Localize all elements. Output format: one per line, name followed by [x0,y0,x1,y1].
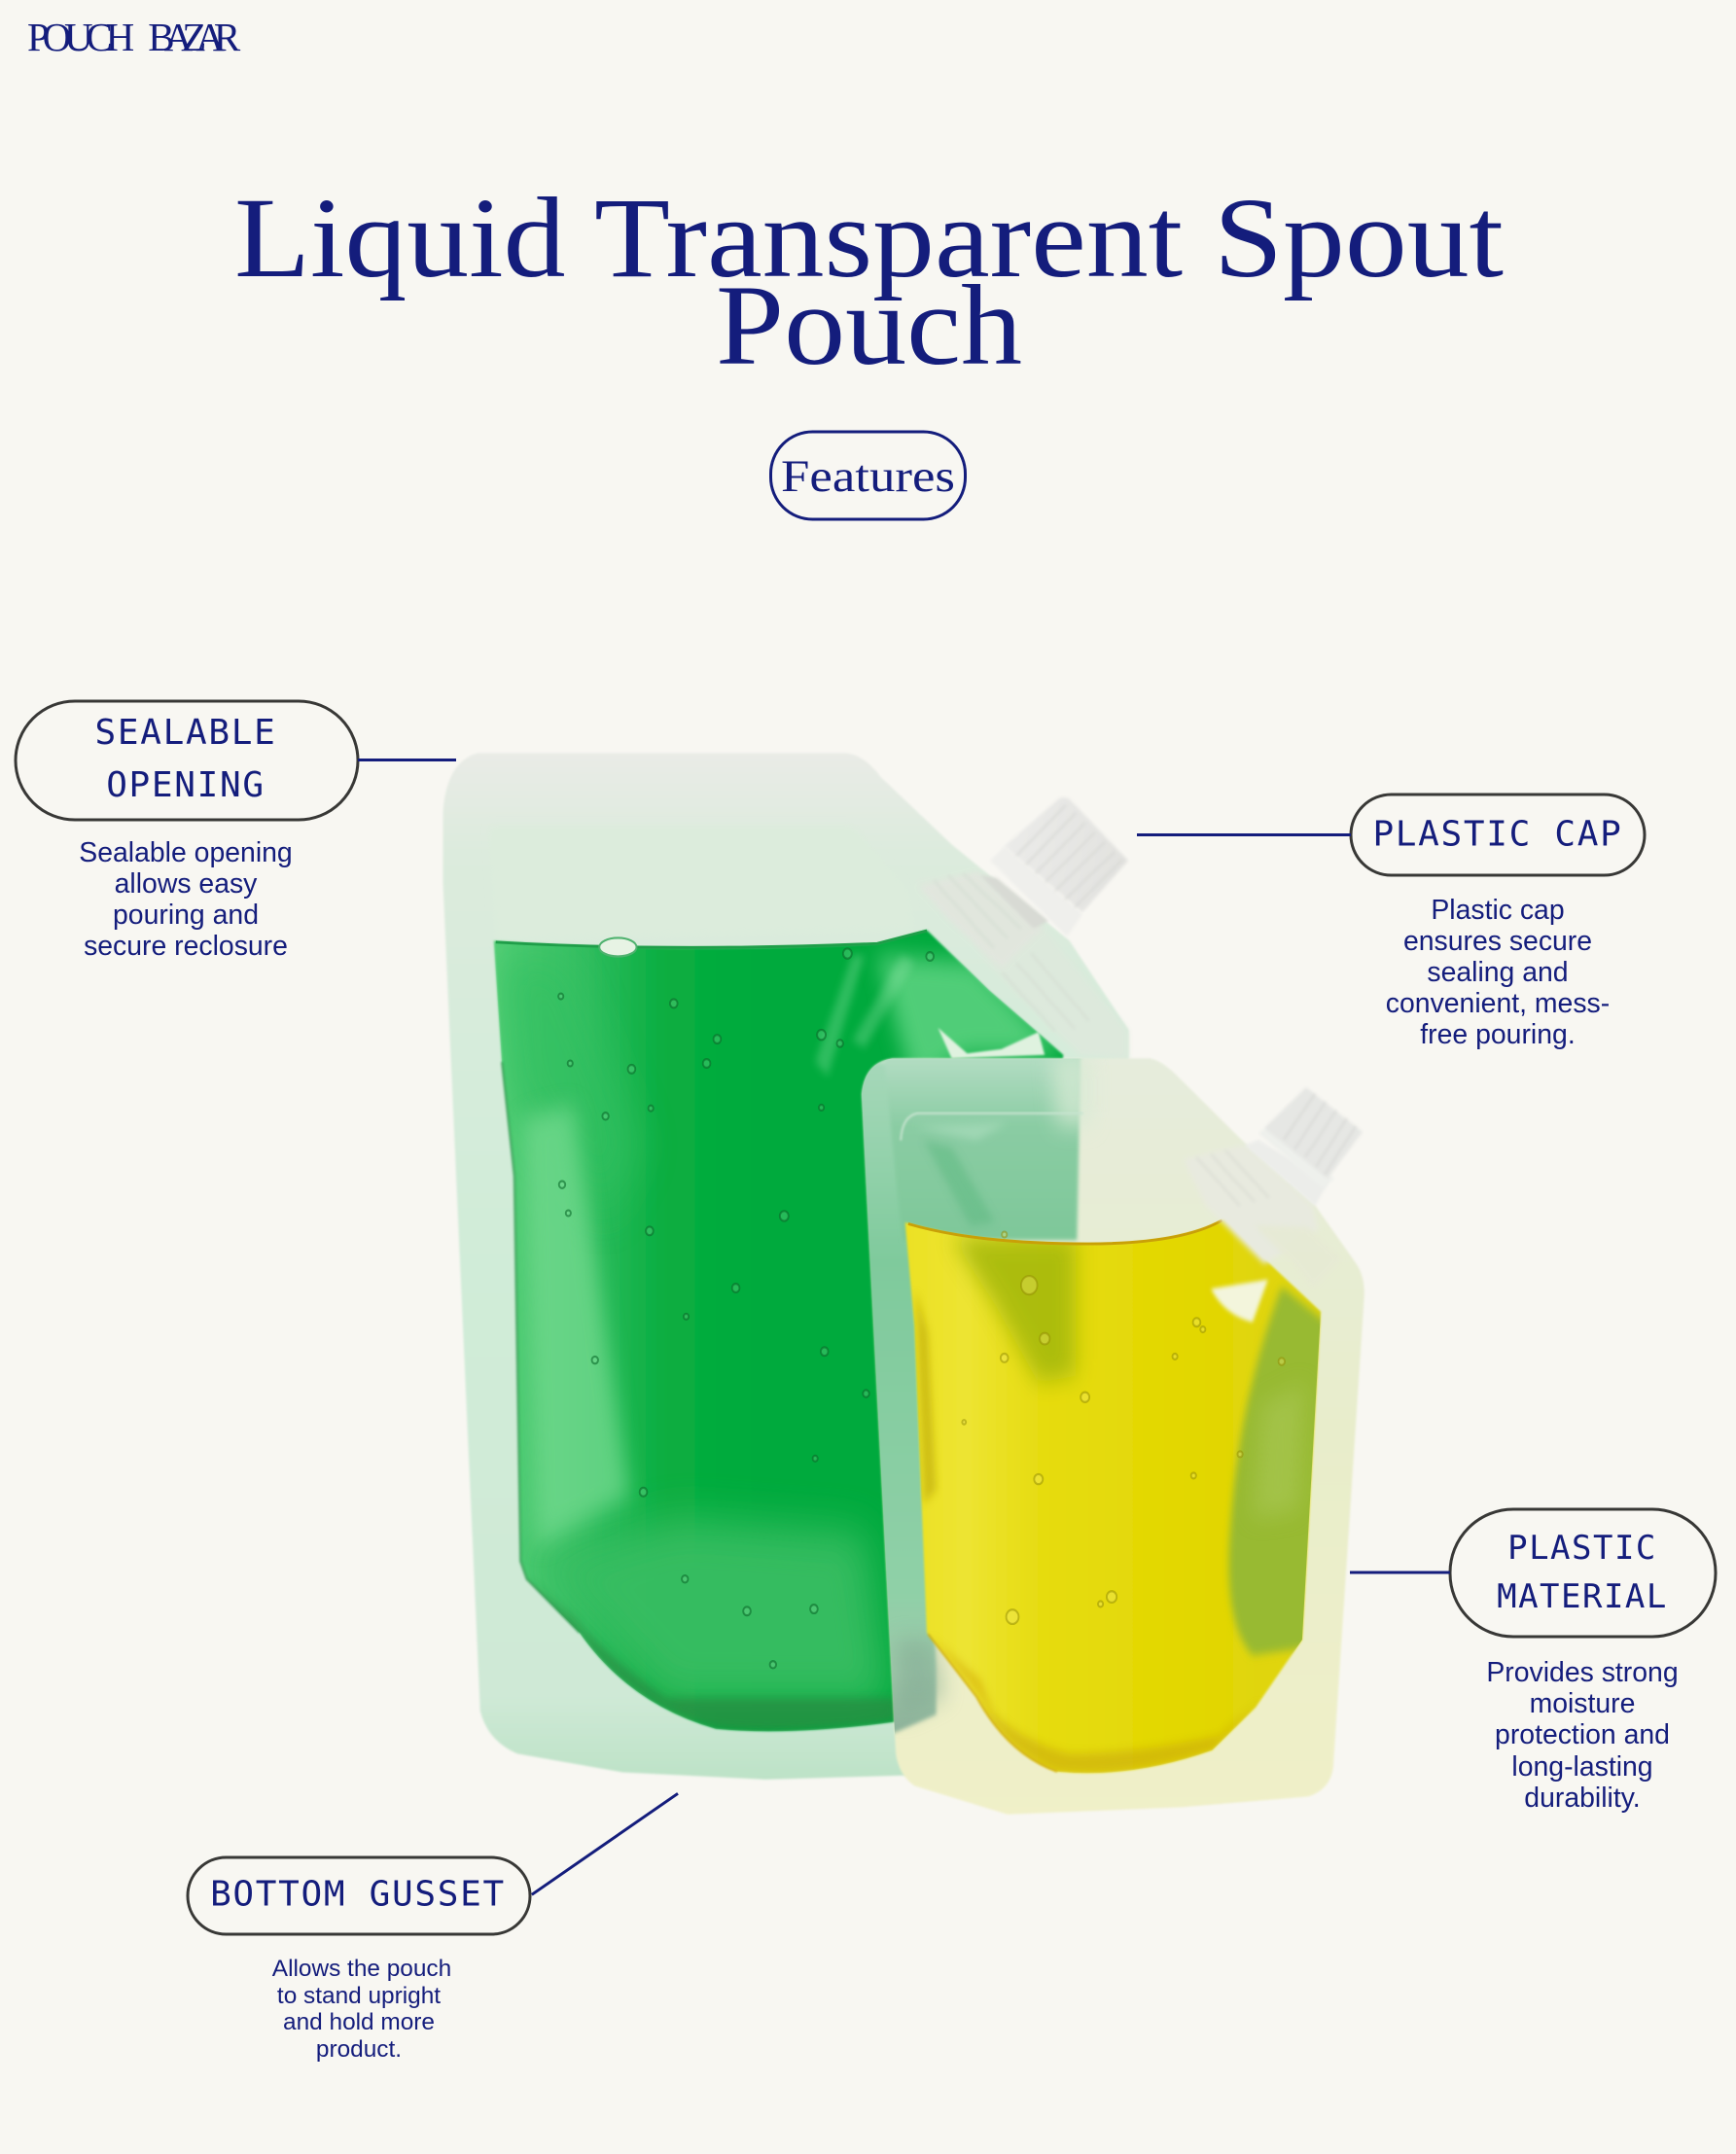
gold left and bottom shading [916,1290,937,1504]
brand logo: POUCH [27,15,134,59]
title [234,174,1504,389]
green liquid [494,930,1063,1731]
yellow liquid [905,1218,1321,1773]
green patch right [1228,1287,1330,1655]
green show-through [852,1051,1091,1732]
callout: plastic material: moisture [1530,1688,1635,1719]
product image: two spout pouches [443,753,1364,1815]
callout: plastic cap [1137,795,1645,1050]
callout: plastic material: PLASTIC [1507,1529,1657,1568]
cap body [1264,1087,1363,1179]
cap body [1005,797,1128,912]
cap ring [990,846,1082,936]
callout: plastic cap: Plastic cap [1431,895,1565,926]
callout: sealable opening: allows easy [115,868,258,900]
callout: sealable opening: Sealable opening [79,837,293,868]
small yellow pouch [852,1051,1364,1815]
callout: bottom gusset: to stand upright [277,1983,441,2009]
features badge [770,432,965,519]
features badge: Features [781,451,955,502]
spout ribs [1196,1150,1269,1206]
callout: bottom gusset: Allows the pouch [272,1956,451,1982]
brand logo: BAZAR [149,15,241,59]
callout: bottom gusset [188,1793,678,2063]
brand logo [27,15,241,59]
callout: bottom gusset: BOTTOM GUSSET [210,1875,506,1914]
inner seal shading [489,827,914,940]
small pouch spout and cap [1184,1087,1363,1289]
spout body [915,873,1128,1060]
highlight under spout [938,1028,1045,1058]
olive show-through [952,1237,1076,1383]
callout: plastic cap: sealing and [1427,957,1569,988]
callout: plastic material: durability. [1524,1783,1641,1814]
cap ribs [1016,805,1122,907]
liquid light and shaded areas [499,955,1063,1731]
neck [980,875,1048,929]
bubbles [558,948,934,1668]
dark base of liquid [545,1593,894,1731]
cap ring and collar [1245,1140,1329,1206]
liquid surface line [496,931,927,947]
spout body [1184,1145,1318,1264]
callout: plastic cap: PLASTIC CAP [1372,815,1623,854]
callout: sealable opening: pouring and [113,900,259,931]
callout: sealable opening: OPENING [106,765,266,805]
callout: plastic cap: ensures secure [1403,926,1592,957]
gold surface line [908,1220,1222,1244]
large pouch spout and cap [915,797,1128,1060]
callout: plastic material: MATERIAL [1497,1577,1668,1616]
white highlight [1211,1280,1268,1323]
title: Liquid Transparent Spout [234,174,1504,301]
callout: sealable opening: SEALABLE [95,713,276,753]
surface bubble [599,937,637,956]
callout: plastic material: Provides strong [1486,1657,1679,1688]
spout ribs [934,873,1089,1031]
bubbles [962,1232,1285,1624]
cap ribs [1284,1094,1356,1175]
callout: bottom gusset: and hold more [283,2009,435,2035]
callout: plastic material [1350,1509,1716,1814]
grey lower corner [896,1640,945,1718]
callout: sealable opening: secure reclosure [84,931,288,962]
callout: plastic cap: convenient, mess- [1386,988,1610,1019]
callout: plastic cap: free pouring. [1420,1019,1576,1050]
title: Pouch [716,262,1022,389]
callout: plastic material: protection and [1495,1719,1670,1750]
callout: sealable opening [16,701,456,962]
large green pouch [443,753,1128,1780]
callout: bottom gusset: product. [316,2036,402,2063]
callout: plastic material: long-lasting [1511,1751,1653,1783]
